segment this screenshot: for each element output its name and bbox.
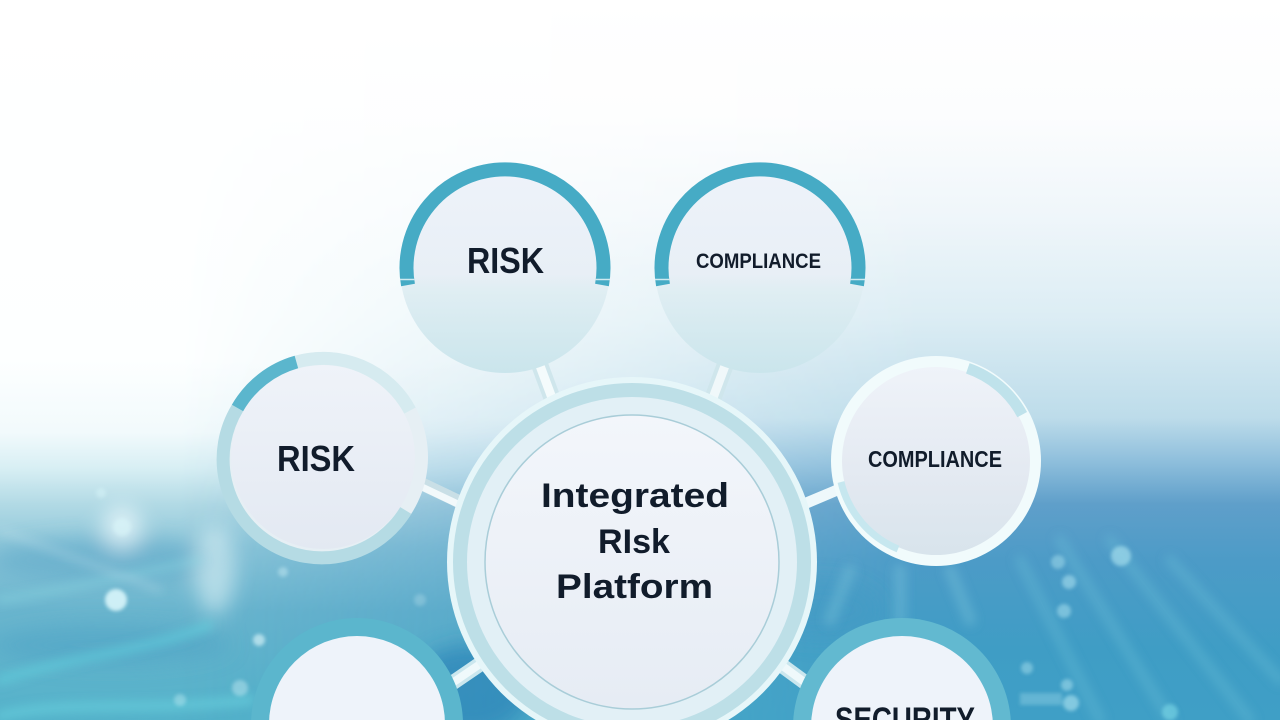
central hub: Integrated Risk Platform (447, 377, 817, 720)
heading: Integrated Risk Platform: RIsk (598, 523, 670, 561)
label: RISK: RISK (467, 240, 544, 281)
node: bottom-right SECURITY (793, 618, 1011, 720)
node: left RISK (218, 352, 428, 562)
label: RISK: RISK (277, 438, 355, 479)
heading: Integrated Risk Platform (541, 477, 729, 606)
node: top-right COMPLIANCE (655, 163, 865, 373)
label: COMPLIANCE: COMPLIANCE (696, 250, 821, 273)
label: COMPLIANCE: COMPLIANCE (868, 446, 1002, 472)
heading: Integrated Risk Platform: Integrated (541, 477, 729, 515)
node: right COMPLIANCE (831, 356, 1041, 566)
background: white fading into blue technology pattern (0, 155, 1280, 720)
node: bottom-left (label cropped) (251, 618, 463, 720)
heading: Integrated Risk Platform: Platform (556, 568, 713, 606)
connectors between hub and satellite nodes (420, 355, 842, 692)
infographic: integrated risk platform hub diagram (0, 155, 1280, 720)
node: top-left RISK (400, 163, 610, 373)
